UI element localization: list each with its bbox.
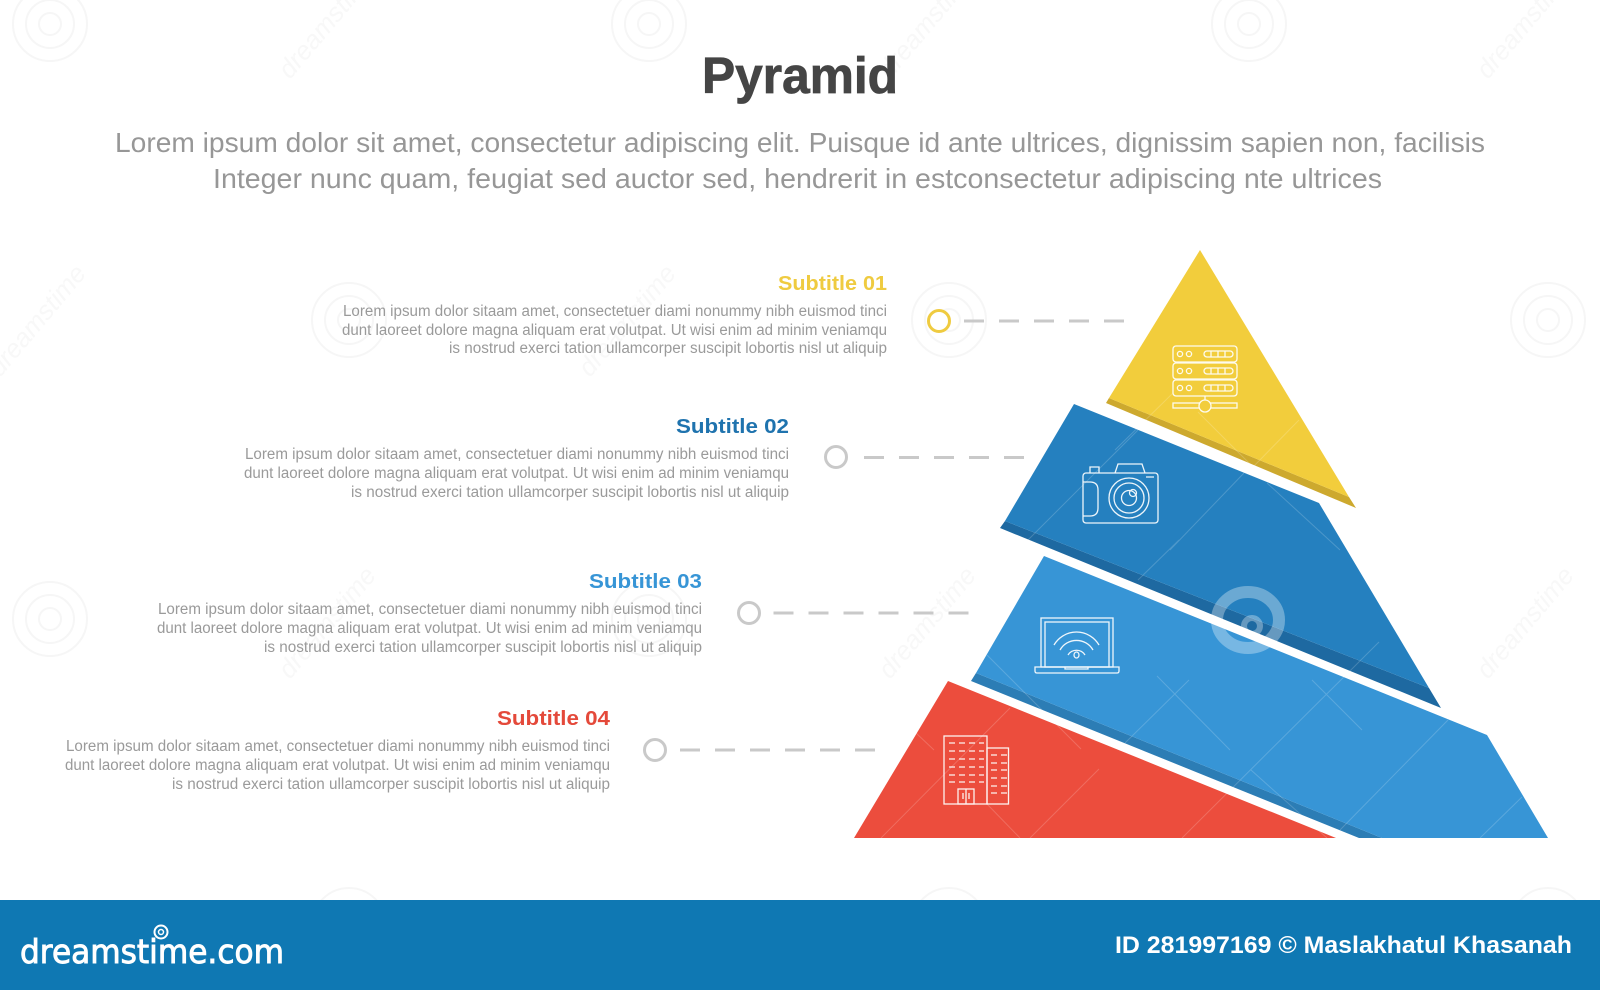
icon: building [944,736,1008,804]
text block: subtitle 02 [244,415,789,501]
connector 4 [644,740,876,760]
text: dreamstime [272,561,382,684]
text: dreamstime [572,259,682,382]
text block: subtitle 04: Subtitle 04 [497,707,611,730]
text block: subtitle 01: Subtitle 01 [778,272,887,295]
footer credit: ID 281997169 © Maslakhatul Khasanah [1115,932,1572,959]
text block: subtitle 01: dunt laoreet dolore magna aliquam erat volutpat. Ut wisi enim ad minim veniamqu [342,322,887,339]
text block: subtitle 01: Lorem ipsum dolor sitaam amet, consectetuer diami nonummy nibh euismod tinci [343,303,887,320]
connector 3 [738,602,969,624]
text block: subtitle 01 [342,272,887,357]
intro text: Lorem ipsum dolor sit amet, consectetur adipiscing elit. Puisque id ante ultrices, dignissim sapien non, facilisis [115,127,1485,158]
text block: subtitle 04: Lorem ipsum dolor sitaam amet, consectetuer diami nonummy nibh euismod tinci [66,738,610,755]
text block: subtitle 04: dunt laoreet dolore magna aliquam erat volutpat. Ut wisi enim ad minim veniamqu [65,757,610,774]
pyramid [854,250,1548,838]
footer bar [0,900,1600,990]
text block: subtitle 02: is nostrud exerci tation ullamcorper suscipit lobortis nisl ut aliquip [351,484,789,501]
footer logo: dreamstime.com [20,932,284,971]
text block: subtitle 02: Lorem ipsum dolor sitaam amet, consectetuer diami nonummy nibh euismod tinci [245,446,789,463]
text block: subtitle 03: Subtitle 03 [589,570,702,593]
icon: laptop [1035,618,1119,673]
connector 1 [928,310,1125,332]
icon: camera [1083,464,1158,523]
intro text [115,127,1485,194]
pyramid layer 1: yellow [1106,250,1356,508]
pyramid layer 3: mid blue [971,556,1548,838]
text block: subtitle 03: Lorem ipsum dolor sitaam amet, consectetuer diami nonummy nibh euismod tinci [158,601,702,618]
text block: subtitle 03: dunt laoreet dolore magna aliquam erat volutpat. Ut wisi enim ad minim veniamqu [157,620,702,637]
text block: subtitle 01: is nostrud exerci tation ullamcorper suscipit lobortis nisl ut aliquip [449,340,887,357]
icon: server [1173,346,1237,412]
text: dreamstime [872,561,982,684]
text: dreamstime [1470,561,1580,684]
text block: subtitle 03: is nostrud exerci tation ullamcorper suscipit lobortis nisl ut aliquip [264,639,702,656]
pyramid layer 2: dark blue [1000,404,1441,708]
text block: subtitle 04: is nostrud exerci tation ullamcorper suscipit lobortis nisl ut aliquip [172,776,610,793]
intro text: Integer nunc quam, feugiat sed auctor sed, hendrerit in estconsectetur adipiscing nte ultrices [213,163,1382,194]
title: Pyramid [702,47,898,104]
text block: subtitle 02: dunt laoreet dolore magna aliquam erat volutpat. Ut wisi enim ad minim veniamqu [244,465,789,482]
connector 2 [826,446,1024,468]
text block: subtitle 02: Subtitle 02 [676,415,789,438]
pyramid layer 4: red [854,681,1336,838]
text block: subtitle 03 [157,570,702,656]
text block: subtitle 04 [65,707,611,793]
